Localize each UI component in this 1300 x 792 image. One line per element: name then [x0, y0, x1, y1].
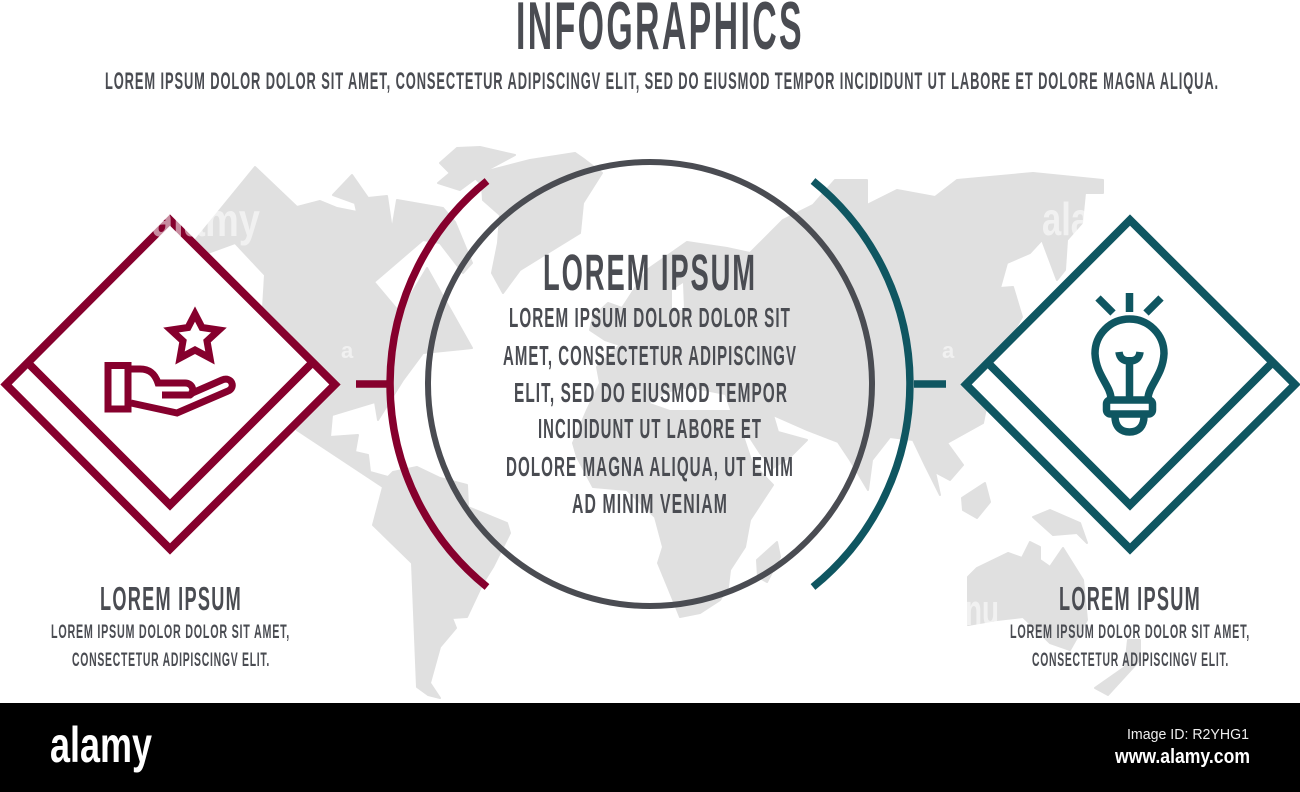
watermarks: ala: [1042, 193, 1090, 245]
right caption: [1010, 580, 1250, 671]
center body text: LOREM IPSUM DOLOR DOLOR SIT: [509, 302, 791, 333]
footer logo: alamy: [50, 717, 152, 773]
left caption body: LOREM IPSUM DOLOR DOLOR SIT AMET,: [51, 622, 290, 643]
center body text: [503, 302, 797, 519]
left caption: [51, 580, 290, 671]
right arc with connector: [813, 181, 946, 587]
website: www.alamy.com: [1114, 746, 1250, 768]
center text block: [503, 244, 797, 519]
icon: light bulb: [1095, 293, 1164, 432]
left caption body: [51, 622, 290, 671]
watermarks: alamy: [152, 194, 260, 246]
watermarks: nu: [965, 586, 999, 635]
center body text: AMET, CONSECTETUR ADIPISCINGV: [503, 340, 797, 371]
footer bar: [0, 703, 1300, 792]
watermarks: a: [341, 338, 354, 363]
center body text: ELIT, SED DO EIUSMOD TEMPOR: [514, 377, 788, 408]
center heading: LOREM IPSUM: [543, 244, 757, 301]
icon: hand holding star: [108, 314, 232, 413]
center body text: AD MINIM VENIAM: [572, 488, 728, 519]
left caption body: CONSECTETUR ADIPISCINGV ELIT.: [72, 650, 270, 671]
center circle: [428, 162, 872, 606]
right diamond: [966, 220, 1295, 549]
world map background: [175, 147, 1140, 698]
image id: Image ID: R2YHG1: [1127, 726, 1249, 743]
center body text: DOLORE MAGNA ALIQUA, UT ENIM: [506, 451, 794, 482]
watermarks: a: [942, 338, 955, 363]
left arc with connector: [356, 181, 487, 587]
right caption body: [1010, 622, 1250, 671]
left caption heading: LOREM IPSUM: [100, 580, 242, 617]
left diamond: [6, 220, 335, 549]
center body text: INCIDIDUNT UT LABORE ET: [538, 413, 762, 444]
watermarks: [152, 193, 1090, 635]
